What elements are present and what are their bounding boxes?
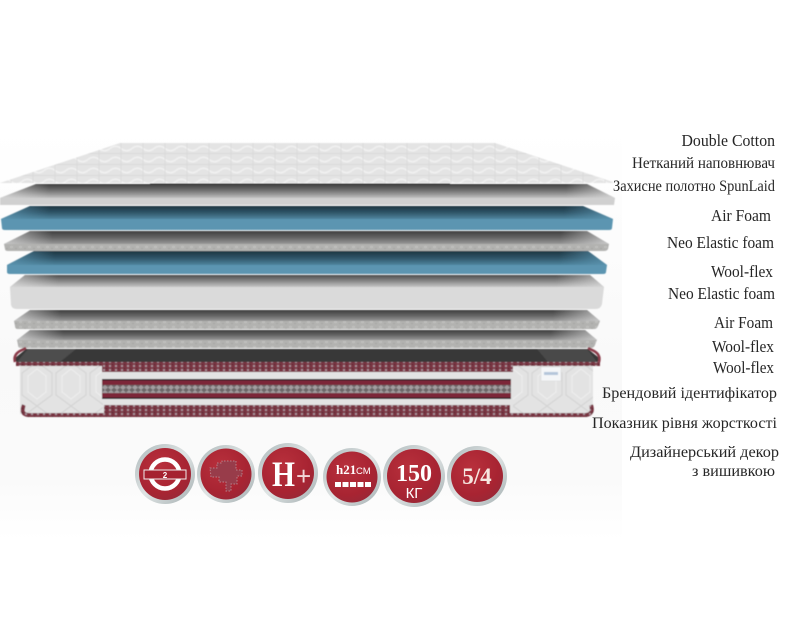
upper embroidery band <box>102 366 513 372</box>
top piping <box>16 362 600 366</box>
label: SpunLaid: Захисне полотно SpunLaid <box>613 178 775 195</box>
layer: Neo Elastic foam white <box>10 275 604 309</box>
badge: 150 kg: КГ <box>406 485 422 502</box>
label: Wool-flex 3: Wool-flex <box>713 358 775 377</box>
label: Wool-flex 1: Wool-flex <box>711 262 774 281</box>
label: brand identifier: Брендовий ідентифікатор <box>602 385 777 402</box>
label: nonwoven filler: Нетканий наповнювач <box>632 155 775 172</box>
label: Wool-flex 2: Wool-flex <box>712 337 775 356</box>
badge: H+ firmness: + <box>296 461 311 491</box>
badge: 5/4 <box>447 446 507 506</box>
layer: Wool-flex blue <box>7 251 607 274</box>
bottom piping <box>23 405 592 415</box>
lower embroidery band <box>104 405 510 413</box>
layer: Air Foam grey <box>14 310 600 329</box>
layer: Neo Elastic foam grey <box>4 231 609 251</box>
badge: 150 kg: 150 <box>396 461 432 487</box>
label: designer decor: Дизайнерський декор <box>630 444 779 461</box>
central embroidery band <box>102 379 511 399</box>
badge: height 21 cm <box>323 448 381 506</box>
layer: Wool-flex grey <box>17 330 597 348</box>
label: Air Foam 2: Air Foam <box>714 313 773 332</box>
badge: H+ firmness <box>258 443 318 503</box>
badge: two-sided flip: 2 <box>163 471 168 480</box>
layer labels <box>592 131 779 480</box>
badge: height 21 cm: h21 <box>336 462 356 477</box>
badge: embroidery map <box>197 445 255 503</box>
quilted corner panel left <box>20 366 103 414</box>
label: Neo Elastic foam 2: Neo Elastic foam <box>668 284 775 303</box>
mattress layers <box>0 143 616 415</box>
brand tag <box>541 367 561 381</box>
layer: Double Cotton top <box>0 143 616 184</box>
badge: height 21 cm: СМ <box>356 466 371 477</box>
badge: two-sided flip <box>135 444 195 504</box>
layer: base with embroidered side <box>15 348 600 415</box>
label: with embroidery: з вишивкою <box>692 463 775 480</box>
background glow <box>0 130 622 540</box>
badge: 5/4: 5/4 <box>462 464 492 489</box>
label: Double Cotton: Double Cotton <box>682 131 775 150</box>
badge: 150 kg <box>383 445 445 507</box>
label: Neo Elastic foam 1: Neo Elastic foam <box>667 233 774 252</box>
label: firmness indicator: Показник рівня жорсткості <box>592 415 778 432</box>
label: Air Foam 1: Air Foam <box>711 206 771 225</box>
layer: Air Foam blue <box>1 206 613 230</box>
quilted corner panel right <box>513 366 593 414</box>
layer: protective SpunLaid cloth <box>0 184 615 205</box>
badge: H+ firmness: H <box>272 454 295 494</box>
badges row <box>135 443 507 507</box>
